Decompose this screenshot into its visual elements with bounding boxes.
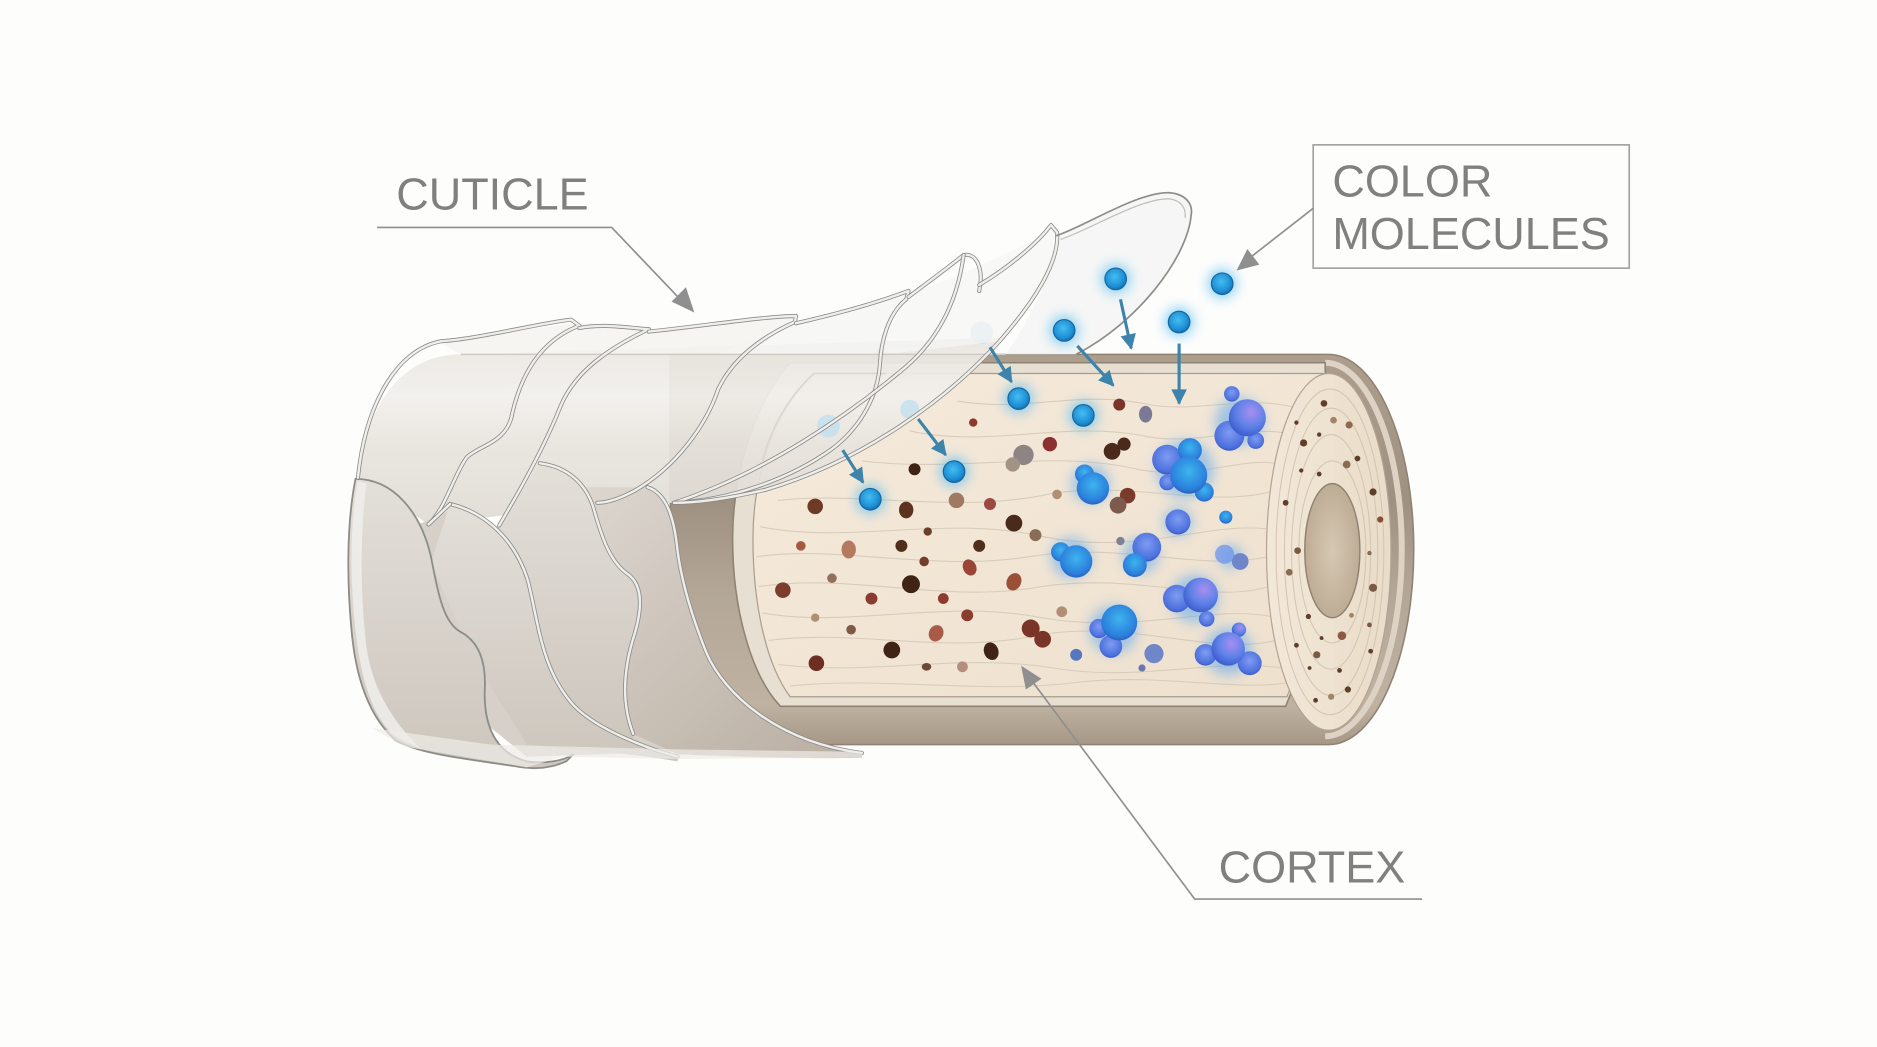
- label: color molecules: COLOR: [1332, 156, 1492, 206]
- cuticle: lower right scale: [575, 487, 862, 758]
- free molecules with glow: [856, 265, 1237, 514]
- label: cortex: CORTEX: [1219, 842, 1405, 892]
- cuticle: lower inner scale: [431, 504, 678, 761]
- end-cap pigment dots: [1283, 400, 1383, 703]
- cortex cut-away rim: [733, 363, 1329, 706]
- cortex tube outer wall: [670, 354, 1414, 745]
- faded molecules behind the scales: [817, 321, 993, 438]
- window edge seen through cuticle: [763, 374, 886, 461]
- label: color molecules: MOLECULES: [1332, 208, 1610, 259]
- central medulla: [1305, 484, 1360, 618]
- color molecules leader line: [1247, 208, 1313, 260]
- callout box: [1313, 145, 1629, 268]
- molecule clusters inside cortex: [1051, 386, 1266, 675]
- label: cuticle: [377, 169, 694, 312]
- cluster glow: [1051, 397, 1263, 675]
- tube end rim: [1325, 363, 1402, 736]
- cuticle: backing under lower scales: [413, 473, 706, 757]
- cortex fibers: [757, 399, 1293, 687]
- cuticle: lifted scale fills: [442, 193, 1191, 354]
- label: cortex: [1021, 666, 1422, 899]
- cuticle: lower left scale: [348, 479, 573, 768]
- cuticle arrowhead: [672, 287, 694, 312]
- molecule entry arrows: [843, 299, 1179, 482]
- cuticle leader line: [377, 227, 685, 304]
- color molecules arrowhead: [1237, 249, 1259, 271]
- cortex interior: [753, 374, 1329, 697]
- brown pigment particles: [775, 399, 1152, 672]
- growth rings: [1276, 389, 1384, 715]
- cortex arrowhead: [1021, 666, 1041, 690]
- cuticle: top line: [461, 353, 1006, 355]
- cuticle: scale outlines: [358, 193, 1191, 526]
- label: color molecules: [1237, 145, 1629, 271]
- label: cuticle: CUTICLE: [396, 169, 589, 219]
- cuticle: upper body and translucent cover over cortex: [358, 338, 1006, 524]
- hair shaft diagram: [347, 144, 1630, 900]
- cuticle: light end band: [351, 481, 421, 749]
- cuticle: lower middle scale: [497, 463, 640, 745]
- cross-section end cap: [1266, 374, 1391, 730]
- cortex leader line: [1029, 678, 1422, 899]
- cuticle: light bottom band: [371, 728, 862, 767]
